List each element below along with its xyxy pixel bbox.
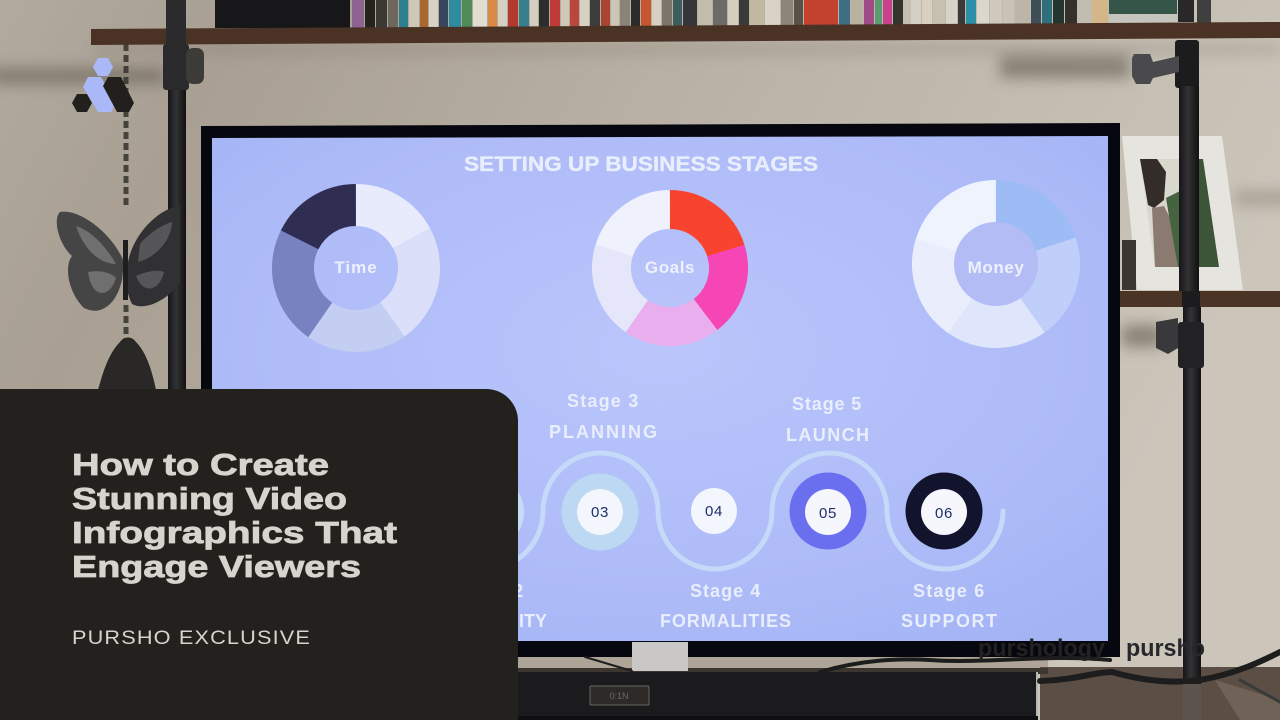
stage 5 labels: LAUNCH [786,425,869,445]
stage 2 labels [454,581,547,631]
stage 3 labels [549,391,657,442]
article title: How to Create [72,447,329,482]
stage 4 labels [660,581,791,631]
left pipe [163,0,204,390]
lower right wooden shelf [1120,291,1280,307]
right pipe and elbow fittings [1132,0,1204,685]
watermark: pursho: pursho [1126,635,1205,662]
stage 6 labels: SUPPORT [901,611,997,631]
TV bezel [201,123,1120,657]
watermark: purshology: purshology [978,635,1106,662]
soundbar: 0:1N [609,691,629,701]
soundbar [518,672,1038,720]
butterfly ornament [57,206,180,311]
stage 6 labels [901,581,997,631]
cables [585,652,1280,702]
donut chart: Goals [588,186,752,350]
stage 6 node [906,472,982,550]
label: Money: Money [968,258,1024,277]
wall shadows [0,46,1280,347]
TV stand bracket [632,642,688,671]
stage 2 node [448,474,524,550]
books on top shelf [215,0,1211,29]
article title: Stunning Video [72,481,347,516]
stage 3 node: 03 [591,504,609,521]
stage 4 labels: Stage 4 [690,581,761,601]
donut chart: Time [268,180,444,356]
article title [72,447,397,584]
hanging chain [124,44,128,340]
stage 5 node [790,472,866,550]
stage 4 labels: FORMALITIES [660,611,791,631]
TV screen [212,136,1108,641]
title panel [0,389,518,720]
category label: PURSHO EXCLUSIVE [72,628,311,649]
wavy stage timeline [428,453,1003,569]
stage 3 node [562,474,638,550]
hanging bell [98,338,156,390]
top wooden shelf [91,22,1280,45]
stage 5 labels: Stage 5 [792,394,862,414]
donut chart: Money [908,176,1084,352]
article title: Infographics That [72,515,397,550]
picture frame [1122,136,1243,290]
stage 4 node: 04 [705,503,723,520]
stage 5 labels [786,394,869,445]
stage 3 labels: Stage 3 [567,391,639,411]
desk surface and wall below TV [518,656,1280,720]
stage 6 node: 06 [935,505,953,522]
pipe over lower shelf [1182,291,1200,307]
stage 5 node: 05 [819,505,837,522]
logo [72,58,134,112]
label: Time: Time [334,258,378,277]
article title: Engage Viewers [72,549,361,584]
stage 4 node [691,488,737,534]
stage 6 labels: Stage 6 [913,581,985,601]
screen heading: SETTING UP BUSINESS STAGES [464,153,818,176]
stage 3 labels: PLANNING [549,422,657,442]
stage 2 labels: Stage 2 [454,581,524,601]
label: Goals: Goals [645,258,695,277]
stage 2 labels: ITY [519,611,547,631]
right pipe base [1183,684,1201,720]
